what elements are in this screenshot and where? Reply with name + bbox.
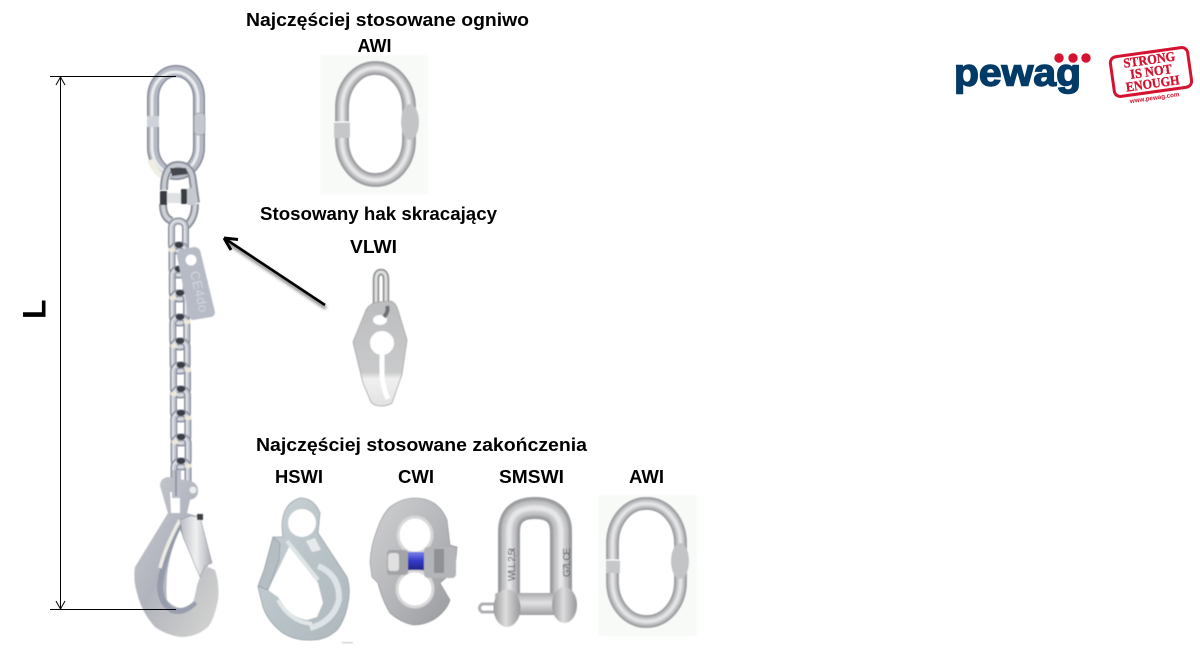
chain tag	[177, 247, 215, 320]
label: SMSWI: SMSWI	[499, 467, 564, 487]
swivel connector	[160, 165, 196, 228]
heading: shortening hook: Stosowany hak skracający	[260, 204, 497, 224]
dimension: length L: L	[16, 299, 52, 319]
stamp: strong is not enough	[1110, 47, 1194, 107]
dimension: length L	[16, 76, 176, 610]
image: SMSWI shackle: WLL 2,5t	[507, 548, 518, 581]
hook	[134, 470, 219, 637]
stamp: strong is not enough: STRONG	[1122, 49, 1176, 71]
label: AWI: AWI	[629, 467, 664, 487]
label: VLWI: VLWI	[350, 237, 397, 257]
image: SMSWI shackle: G7L CE	[562, 548, 573, 577]
image: AWI end link	[598, 495, 697, 636]
image: CWI connecting link	[370, 498, 457, 625]
stamp: strong is not enough: www.pewag.com	[1128, 91, 1180, 105]
master link	[147, 71, 205, 178]
chain joints	[168, 242, 192, 468]
stamp: strong is not enough: IS NOT	[1129, 61, 1173, 82]
heading: most used link: AWI	[358, 36, 392, 56]
label: CWI: CWI	[398, 467, 434, 487]
arrow	[224, 238, 326, 308]
chain tag: CE4do	[187, 269, 211, 314]
chain sling assembly	[134, 71, 219, 637]
label: HSWI: HSWI	[275, 467, 323, 487]
image: AWI master link	[320, 55, 428, 195]
heading: terminations: Najczęściej stosowane zakończenia	[256, 435, 588, 455]
heading: most used link: Najczęściej stosowane ogniwo	[246, 10, 529, 30]
chain links	[171, 221, 188, 491]
heading: most used link	[246, 10, 529, 56]
stamp: strong is not enough: ENOUGH	[1125, 72, 1181, 95]
image: SMSWI shackle	[480, 508, 577, 627]
image: VLWI shortening hook	[353, 272, 407, 406]
logo: pewag: pewag	[954, 52, 1081, 94]
image: HSWI eye hook	[258, 498, 353, 644]
